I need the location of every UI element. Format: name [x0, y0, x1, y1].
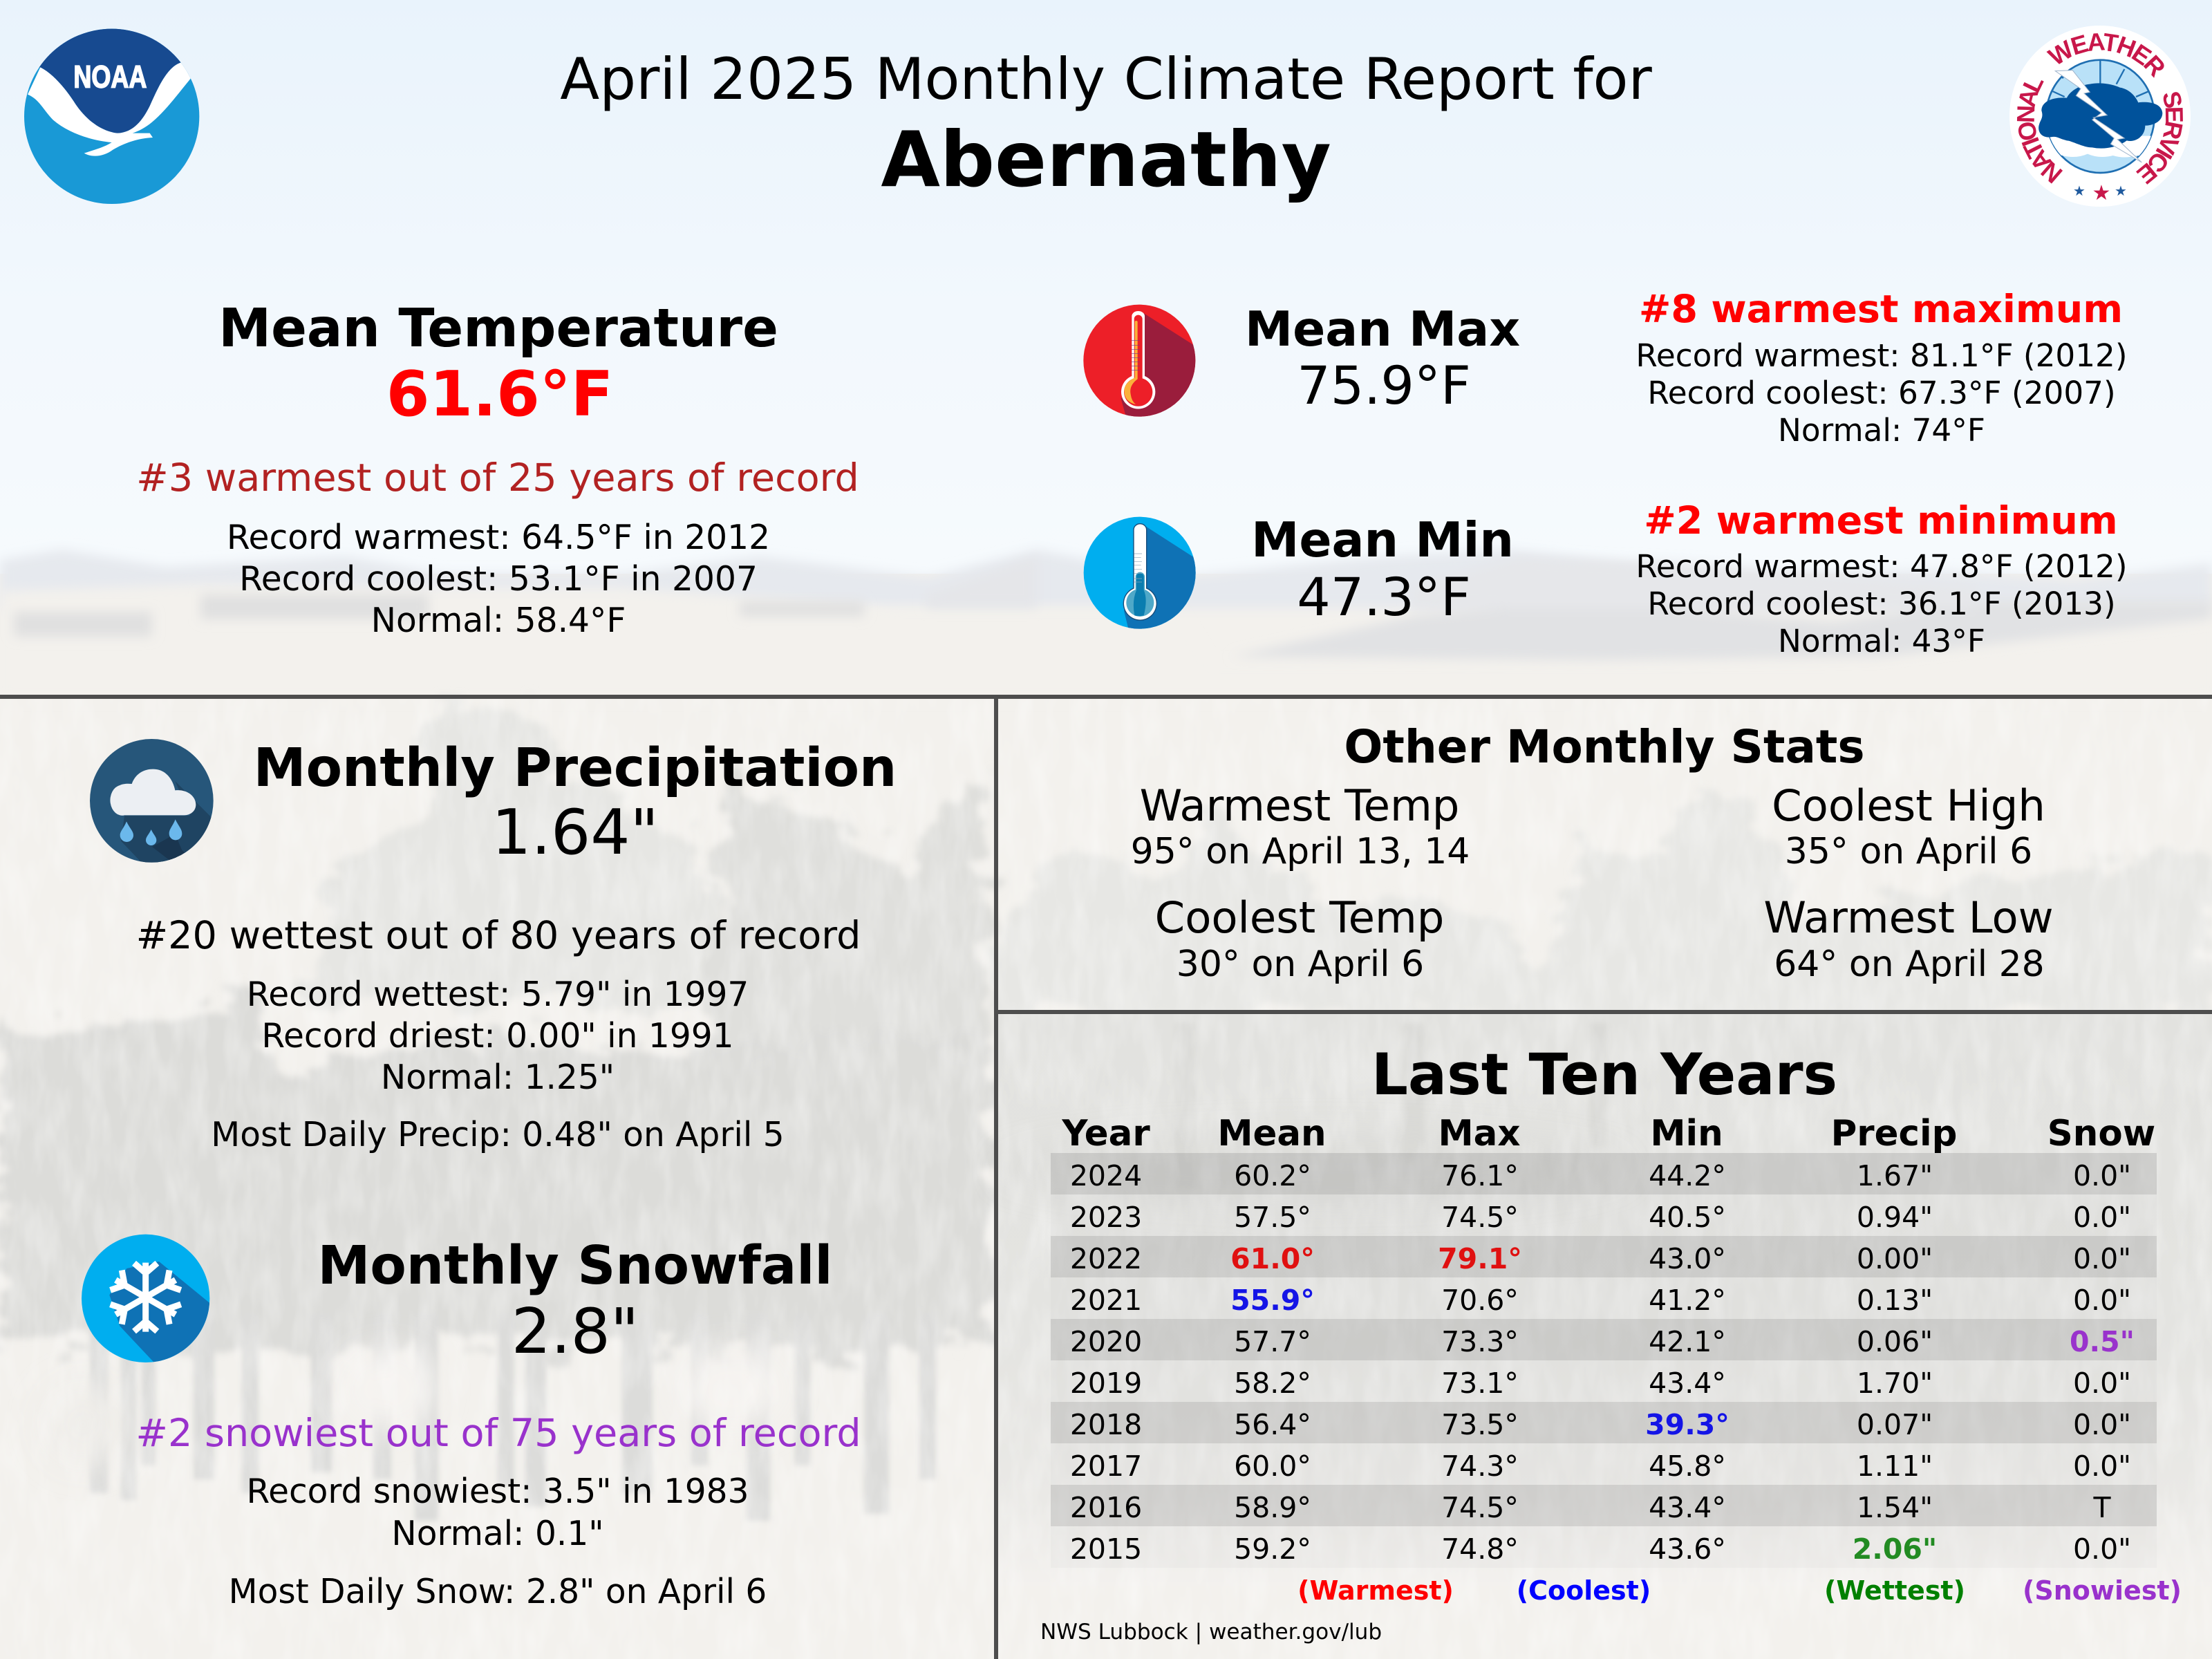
table values: 0.0": [2073, 1201, 2131, 1234]
records: snowfall: Record snowiest: 3.5" in 1983: [246, 1472, 749, 1511]
table values: 1.11": [1857, 1450, 1933, 1483]
table values: 1.70": [1857, 1367, 1933, 1400]
table header: Max: [1438, 1113, 1520, 1154]
table legend: (Wettest): [1824, 1575, 1965, 1606]
icon: National Weather Service logo: SERVICE: [2136, 92, 2183, 185]
table values: 74.8°: [1441, 1533, 1519, 1566]
rank: snowfall: #2 snowiest out of 75 years of record: [135, 1411, 861, 1456]
table values: 61.0°: [1230, 1242, 1315, 1275]
icon: National Weather Service logo: ★: [2115, 182, 2127, 199]
table values: 43.4°: [1649, 1491, 1726, 1524]
table values: 39.3°: [1645, 1408, 1730, 1441]
table values: 56.4°: [1234, 1408, 1311, 1441]
records: snowfall: Most Daily Snow: 2.8" on April 6: [229, 1573, 767, 1611]
table header: Min: [1650, 1113, 1723, 1154]
tree masses: [0, 698, 2212, 1348]
heading: mean temperature: Mean Temperature: [218, 298, 778, 359]
records: precipitation: Record wettest: 5.79" in 1997: [247, 975, 749, 1014]
stat: coolest high: Coolest High: [1772, 780, 2045, 831]
table values: 2018: [1070, 1408, 1142, 1441]
records: mean min: Record coolest: 36.1°F (2013): [1647, 585, 2116, 622]
table values: 73.5°: [1441, 1408, 1519, 1441]
records: mean max: [1635, 337, 2128, 449]
table values: 55.9°: [1230, 1284, 1315, 1317]
table values: 58.9°: [1234, 1491, 1311, 1524]
table values: 2020: [1070, 1325, 1142, 1358]
table values: 58.2°: [1234, 1367, 1311, 1400]
records: mean max: Record warmest: 81.1°F (2012): [1635, 337, 2128, 374]
value: mean max: 75.9°F: [1297, 355, 1471, 416]
panel: mean max: [1083, 287, 2128, 449]
stat: coolest temp: 30° on April 6: [1177, 944, 1424, 985]
table values: 0.00": [1857, 1242, 1933, 1275]
table values: 74.5°: [1441, 1491, 1519, 1524]
panel: other monthly stats: [1131, 720, 2054, 985]
icon: National Weather Service logo: ★: [2073, 182, 2086, 199]
records: snowfall: Normal: 0.1": [391, 1515, 604, 1553]
stat: warmest temp: [1131, 780, 1470, 872]
table values: 43.4°: [1649, 1367, 1726, 1400]
table values: 0.0": [2073, 1242, 2131, 1275]
icon: cold thermometer: [1084, 517, 1198, 632]
records: mean max: Record coolest: 67.3°F (2007): [1647, 375, 2116, 411]
heading: monthly snowfall: Monthly Snowfall: [317, 1235, 833, 1296]
panel: monthly precipitation: [90, 737, 897, 1154]
icon: warm thermometer: [1083, 305, 1198, 420]
table values: 0.5": [2070, 1325, 2135, 1358]
table values: 2.06": [1853, 1533, 1937, 1566]
table header: [1061, 1113, 2155, 1154]
table legend: [1297, 1575, 2182, 1606]
photo grain: [0, 699, 2212, 1659]
table values: 0.0": [2073, 1159, 2131, 1192]
panel: mean temperature: [136, 298, 859, 640]
table values: 57.7°: [1234, 1325, 1311, 1358]
table values: 41.2°: [1649, 1284, 1726, 1317]
records: mean temperature: Normal: 58.4°F: [371, 601, 626, 640]
table values: 60.2°: [1234, 1159, 1311, 1192]
table values: T: [2092, 1491, 2111, 1524]
stat: warmest low: [1763, 892, 2054, 985]
table values: 59.2°: [1234, 1533, 1311, 1566]
icon: NOAA logo: [24, 29, 199, 204]
table values: 2023: [1070, 1201, 1142, 1234]
table values: 0.0": [2073, 1533, 2131, 1566]
table values: 0.06": [1857, 1325, 1933, 1358]
title: April 2025 Monthly Climate Report for: [560, 46, 1652, 113]
panel: monthly snowfall: [82, 1235, 861, 1611]
records: mean min: Record warmest: 47.8°F (2012): [1635, 548, 2128, 585]
value: monthly precipitation: 1.64": [491, 796, 659, 869]
heading: mean max: Mean Max: [1245, 301, 1520, 357]
table values: 2024: [1070, 1159, 1142, 1192]
table values: 42.1°: [1649, 1325, 1726, 1358]
icon: National Weather Service logo: NATIONAL: [2017, 80, 2063, 184]
icon: snowflake: [82, 1235, 209, 1364]
rank: precipitation: #20 wettest out of 80 years of record: [136, 913, 861, 958]
stat: coolest high: 35° on April 6: [1785, 831, 2032, 872]
icon: NOAA logo: NOAA: [73, 59, 147, 95]
stat: warmest low: Warmest Low: [1763, 892, 2054, 943]
title: [560, 46, 1652, 205]
stat: warmest temp: 95° on April 13, 14: [1131, 831, 1470, 872]
table header: Year: [1061, 1113, 1150, 1154]
icon: National Weather Service logo: ★: [2092, 181, 2110, 205]
table values: 79.1°: [1438, 1242, 1522, 1275]
value: mean temperature: 61.6°F: [386, 358, 613, 431]
table values: 45.8°: [1649, 1450, 1726, 1483]
table header: Precip: [1831, 1113, 1957, 1154]
table values: 2021: [1070, 1284, 1142, 1317]
stat: coolest temp: [1155, 892, 1444, 985]
table values: 2019: [1070, 1367, 1142, 1400]
section dividers: [0, 695, 2212, 1659]
icon: National Weather Service logo: WEATHER: [2046, 33, 2164, 78]
stat: coolest temp: Coolest Temp: [1155, 892, 1444, 943]
footer credit: NWS Lubbock | weather.gov/lub: [1040, 1620, 1382, 1644]
table header: Mean: [1217, 1113, 1327, 1154]
value: mean min: 47.3°F: [1297, 566, 1471, 628]
table values: 44.2°: [1649, 1159, 1726, 1192]
stat: warmest temp: Warmest Temp: [1140, 780, 1459, 831]
table values: 0.94": [1857, 1201, 1933, 1234]
table values: 73.1°: [1441, 1367, 1519, 1400]
table values: 0.0": [2073, 1367, 2131, 1400]
table values: 0.0": [2073, 1450, 2131, 1483]
heading: monthly precipitation: Monthly Precipitation: [254, 737, 897, 798]
records: mean min: Normal: 43°F: [1778, 623, 1985, 659]
records: mean min: [1635, 548, 2128, 659]
table values: 70.6°: [1441, 1284, 1519, 1317]
table values: 76.1°: [1441, 1159, 1519, 1192]
table legend: (Snowiest): [2023, 1575, 2182, 1606]
table values: 43.6°: [1649, 1533, 1726, 1566]
table values: 43.0°: [1649, 1242, 1726, 1275]
table values: 73.3°: [1441, 1325, 1519, 1358]
rank: warmest minimum: #2 warmest minimum: [1644, 498, 2118, 543]
table values: 74.3°: [1441, 1450, 1519, 1483]
table values: 57.5°: [1234, 1201, 1311, 1234]
rank: mean temperature: #3 warmest out of 25 years of record: [136, 456, 859, 500]
table legend: (Warmest): [1297, 1575, 1454, 1606]
table values: 40.5°: [1649, 1201, 1726, 1234]
records: mean temperature: [227, 518, 770, 640]
panel: mean min: [1084, 498, 2128, 659]
table values: 60.0°: [1234, 1450, 1311, 1483]
table values: 1.67": [1857, 1159, 1933, 1192]
heading: other monthly stats: Other Monthly Stats: [1344, 720, 1865, 774]
heading: mean min: Mean Min: [1251, 512, 1514, 568]
value: monthly snowfall: 2.8": [512, 1295, 639, 1368]
table row bands: [1051, 1153, 2157, 1568]
table header: Snow: [2047, 1113, 2155, 1154]
records: mean temperature: Record coolest: 53.1°F in 2007: [239, 560, 758, 599]
table values: 0.0": [2073, 1284, 2131, 1317]
table values: 74.5°: [1441, 1201, 1519, 1234]
records: precipitation: Most Daily Precip: 0.48" on April 5: [211, 1116, 785, 1154]
records: mean max: Normal: 74°F: [1778, 412, 1985, 449]
stat: warmest low: 64° on April 28: [1774, 944, 2045, 985]
station name: Abernathy: [881, 115, 1331, 205]
rank: warmest maximum: #8 warmest maximum: [1639, 287, 2123, 332]
table values: [1070, 1159, 2135, 1566]
records: precipitation: [211, 975, 785, 1154]
table legend: (Coolest): [1517, 1575, 1651, 1606]
records: snowfall: [229, 1472, 767, 1611]
records: mean temperature: Record warmest: 64.5°F in 2012: [227, 518, 770, 557]
table values: 2017: [1070, 1450, 1142, 1483]
icon: National Weather Service logo: [2009, 26, 2191, 207]
records: precipitation: Record driest: 0.00" in 1991: [261, 1017, 734, 1056]
table values: 1.54": [1857, 1491, 1933, 1524]
heading: last ten years: Last Ten Years: [1371, 1041, 1837, 1108]
table values: 2015: [1070, 1533, 1142, 1566]
table values: 2022: [1070, 1242, 1142, 1275]
panel: last ten years: [1051, 1041, 2182, 1606]
records: precipitation: Normal: 1.25": [381, 1058, 615, 1097]
table values: 2016: [1070, 1491, 1142, 1524]
stat: coolest high: [1772, 780, 2045, 872]
table values: 0.0": [2073, 1408, 2131, 1441]
table values: 0.07": [1857, 1408, 1933, 1441]
icon: rain cloud: [90, 739, 214, 866]
table values: 0.13": [1857, 1284, 1933, 1317]
